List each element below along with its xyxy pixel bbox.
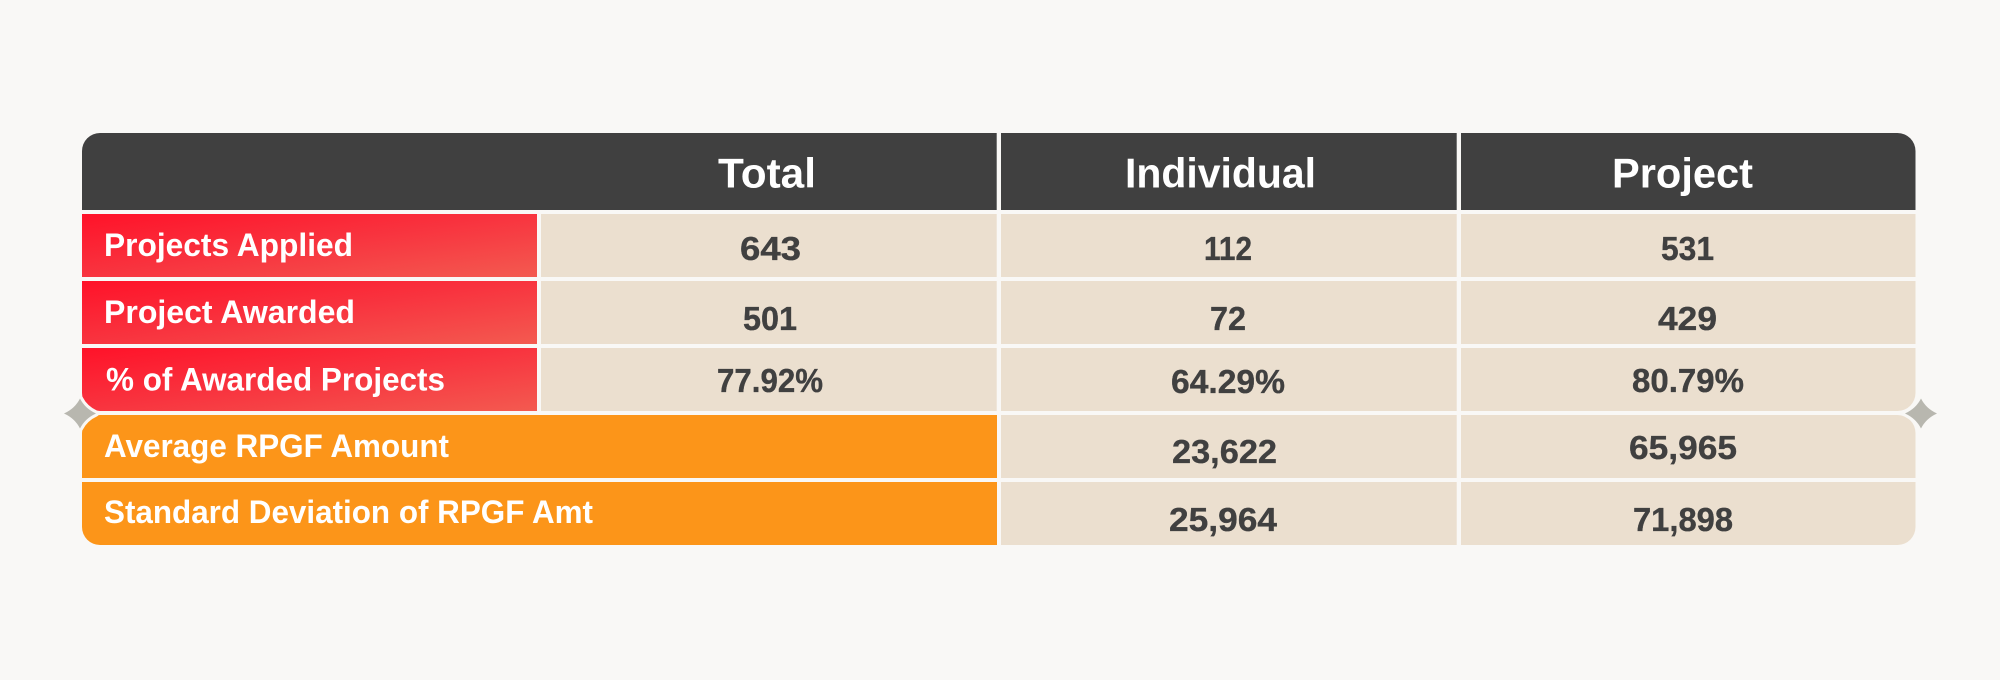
header cell: Individual: Individual [1125, 150, 1316, 196]
value: individual 23,622 [1001, 415, 1457, 478]
value: total 501 [541, 281, 997, 344]
value: individual 64.29% [1001, 348, 1457, 411]
value: project 80.79%: 80.79% [1632, 362, 1744, 399]
value: project 65,965 [1461, 415, 1916, 478]
value: project 71,898: 71,898 [1633, 501, 1733, 538]
value: individual 72 [1001, 281, 1457, 344]
value: individual 112 [1001, 214, 1457, 277]
value: individual 25,964: 25,964 [1169, 501, 1278, 538]
header cell: Project: Project [1612, 150, 1753, 196]
row: Standard Deviation of RPGF Amt [82, 482, 1916, 545]
value: individual 64.29%: 64.29% [1171, 363, 1285, 400]
label: Average RPGF Amount: Average RPGF Amount [104, 428, 449, 464]
value: project 65,965: 65,965 [1629, 429, 1737, 466]
value: total 77.92% [541, 348, 997, 411]
value: individual 23,622: 23,622 [1172, 433, 1277, 470]
row: Project Awarded [82, 281, 1916, 344]
row: Average RPGF Amount [82, 415, 1916, 478]
label: Project Awarded [82, 281, 537, 344]
value: total 501: 501 [743, 300, 797, 337]
value: individual 112: 112 [1204, 230, 1252, 267]
label: Project Awarded: Project Awarded [104, 294, 355, 330]
value: project 80.79% [1461, 348, 1916, 411]
value: project 429 [1461, 281, 1916, 344]
label: Average RPGF Amount [82, 415, 997, 478]
value: project 429: 429 [1658, 300, 1717, 337]
header cell: row labels and Total: Total [718, 150, 816, 196]
header cell: Project [1461, 133, 1916, 210]
label: Projects Applied [82, 214, 537, 277]
value: project 531 [1461, 214, 1916, 277]
label: % of Awarded Projects [82, 348, 537, 411]
icon: left sparkle [64, 398, 96, 428]
value: total 643 [541, 214, 997, 277]
value: total 77.92%: 77.92% [717, 362, 823, 399]
value: individual 72: 72 [1210, 300, 1246, 337]
label: Standard Deviation of RPGF Amt [82, 482, 997, 545]
icon: right sparkle [1905, 398, 1937, 428]
label: Projects Applied: Projects Applied [104, 227, 353, 263]
value: individual 25,964 [1001, 482, 1457, 545]
value: total 643: 643 [740, 230, 801, 267]
row: Projects Applied [82, 214, 1916, 277]
header row [82, 133, 1916, 210]
label: % of Awarded Projects: % of Awarded Projects [106, 362, 445, 398]
header cell: row labels and Total [82, 133, 997, 210]
label: Standard Deviation of RPGF Amt: Standard Deviation of RPGF Amt [104, 494, 593, 530]
value: project 531: 531 [1661, 230, 1714, 267]
value: project 71,898 [1461, 482, 1916, 545]
header cell: Individual [1001, 133, 1457, 210]
row: % of Awarded Projects [82, 348, 1916, 411]
